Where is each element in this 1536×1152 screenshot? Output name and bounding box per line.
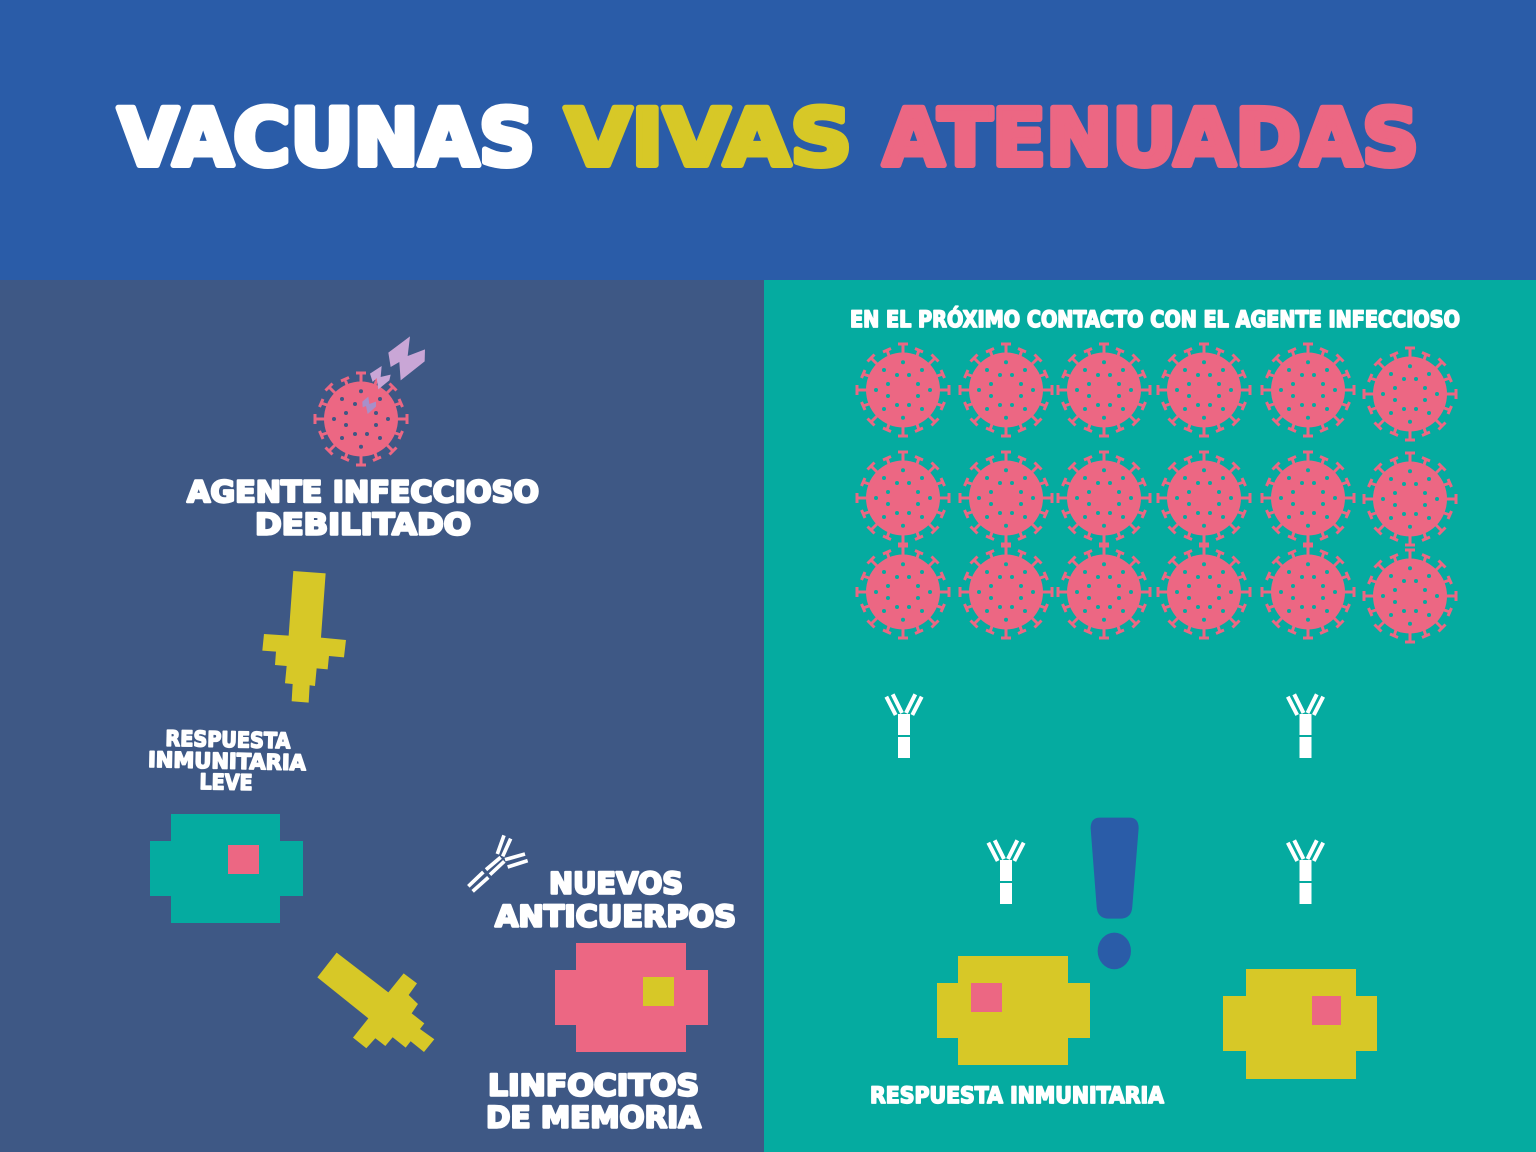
left panel background xyxy=(0,280,764,1152)
title: VIVAS xyxy=(565,94,852,184)
label: memory lymphocytes: DE MEMORIA xyxy=(486,1100,701,1134)
icon: sleeping virus xyxy=(315,336,425,465)
title: ATENUADAS xyxy=(883,94,1419,184)
cell: teal lymphocyte xyxy=(150,814,303,923)
label: memory lymphocytes: LINFOCITOS xyxy=(488,1068,699,1102)
label: mild immune response xyxy=(147,726,307,797)
label: new antibodies: ANTICUERPOS xyxy=(495,900,736,934)
label: immune response: RESPUESTA INMUNITARIA xyxy=(870,1083,1165,1109)
cell: yellow lymphocyte right xyxy=(1223,969,1377,1079)
header band xyxy=(0,0,1536,280)
title: VACUNAS xyxy=(118,94,535,184)
arrow: down to immune response xyxy=(262,571,346,703)
heading: weakened infectious agent: AGENTE INFECCIOSO xyxy=(187,475,539,509)
title xyxy=(118,94,1419,184)
arrow: to memory lymphocytes xyxy=(317,953,434,1052)
cell: pink memory lymphocyte xyxy=(555,943,708,1052)
heading: weakened infectious agent: DEBILITADO xyxy=(255,508,471,542)
label: mild immune response: LEVE xyxy=(199,770,253,796)
cell: yellow lymphocyte left xyxy=(937,956,1090,1065)
icon: exclamation mark xyxy=(1091,818,1139,969)
icon: antibody xyxy=(468,835,528,891)
virus grid xyxy=(857,344,1456,642)
label: new antibodies xyxy=(495,866,736,934)
antibodies xyxy=(886,694,1323,904)
label: mild immune response: INMUNITARIA xyxy=(148,748,307,776)
label: memory lymphocytes xyxy=(486,1068,701,1134)
heading: weakened infectious agent xyxy=(187,475,539,542)
right panel background xyxy=(764,280,1536,1152)
label: new antibodies: NUEVOS xyxy=(549,866,683,900)
label: mild immune response: RESPUESTA xyxy=(165,727,291,754)
